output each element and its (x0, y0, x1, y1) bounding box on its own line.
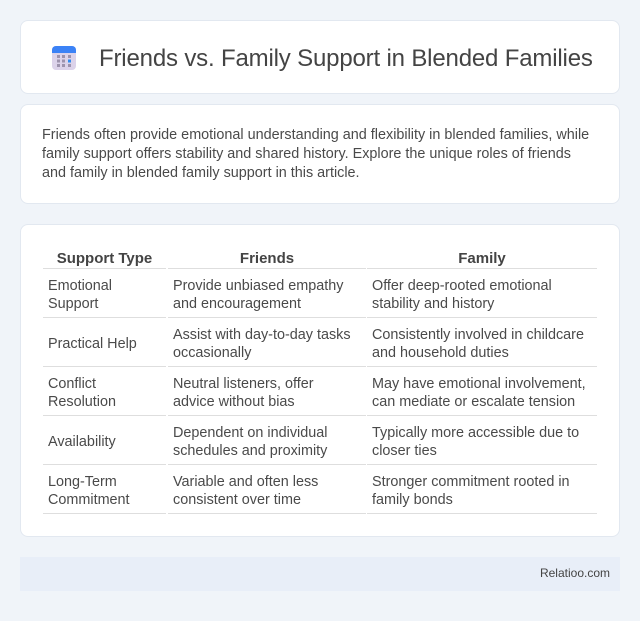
row 4: friends: Dependent on individual (173, 425, 327, 441)
row 5: friends (173, 474, 318, 508)
row 1: friends: and encouragement (173, 296, 301, 312)
table header: Family: Family (458, 250, 506, 267)
row 4: family (372, 425, 579, 459)
row 3: Conflict Resolution: Resolution (48, 394, 116, 410)
row 4: family: closer ties (372, 443, 437, 459)
row 1: family (372, 278, 552, 312)
table header: Friends: Friends (240, 250, 294, 267)
row 2: family: and household duties (372, 345, 509, 361)
intro text (42, 127, 589, 181)
row 3: friends: advice without bias (173, 394, 295, 410)
row 2: friends: Assist with day-to-day tasks (173, 327, 351, 343)
row 2: family: Consistently involved in childcare (372, 327, 584, 343)
row 3: friends (173, 376, 314, 410)
row 1: family: Offer deep-rooted emotional (372, 278, 552, 294)
row 1: friends (173, 278, 344, 312)
row 1: Emotional Support: Support (48, 296, 98, 312)
row 3: Conflict Resolution: Conflict (48, 376, 96, 392)
table header: Support Type: Support Type (57, 250, 152, 267)
row 4: friends (173, 425, 328, 459)
row 1: Emotional Support (48, 278, 112, 312)
panel: intro card (20, 104, 620, 204)
row 2: Practical Help: Practical Help (48, 336, 137, 352)
row 3: family: can mediate or escalate tension (372, 394, 575, 410)
intro text: Friends often provide emotional understanding and flexibility in blended families, while (42, 127, 589, 143)
row 4: family: Typically more accessible due to (372, 425, 579, 441)
row 1: friends: Provide unbiased empathy (173, 278, 343, 294)
row 5: friends: Variable and often less (173, 474, 318, 490)
row 5: Long-Term Commitment (48, 474, 130, 508)
row 2: friends (173, 327, 351, 361)
row 5: Long-Term Commitment: Long-Term (48, 474, 117, 490)
intro text: family support offers stability and shared history. Explore the unique roles of friends (42, 146, 571, 162)
intro text: and family in blended family support in this article. (42, 165, 360, 181)
row 5: family: Stronger commitment rooted in (372, 474, 570, 490)
row 5: Long-Term Commitment: Commitment (48, 492, 130, 508)
row 2: family (372, 327, 584, 361)
title: Friends vs. Family Support in Blended Families (99, 45, 593, 72)
row 5: family: family bonds (372, 492, 453, 508)
panel: title card (20, 20, 620, 94)
icon: calendar (52, 46, 76, 70)
row 4: Availability: Availability (48, 434, 116, 450)
row 5: family (372, 474, 570, 508)
row 3: friends: Neutral listeners, offer (173, 376, 314, 392)
footer text: Relatioo.com (540, 566, 610, 580)
row 1: family: stability and history (372, 296, 494, 312)
row 4: friends: schedules and proximity (173, 443, 327, 459)
row 3: family (372, 376, 586, 410)
row 5: friends: consistent over time (173, 492, 301, 508)
row 2: friends: occasionally (173, 345, 251, 361)
footer bar (20, 557, 620, 591)
row 1: Emotional Support: Emotional (48, 278, 112, 294)
row 3: Conflict Resolution (48, 376, 116, 410)
panel: comparison table (20, 224, 620, 537)
row 3: family: May have emotional involvement, (372, 376, 586, 392)
